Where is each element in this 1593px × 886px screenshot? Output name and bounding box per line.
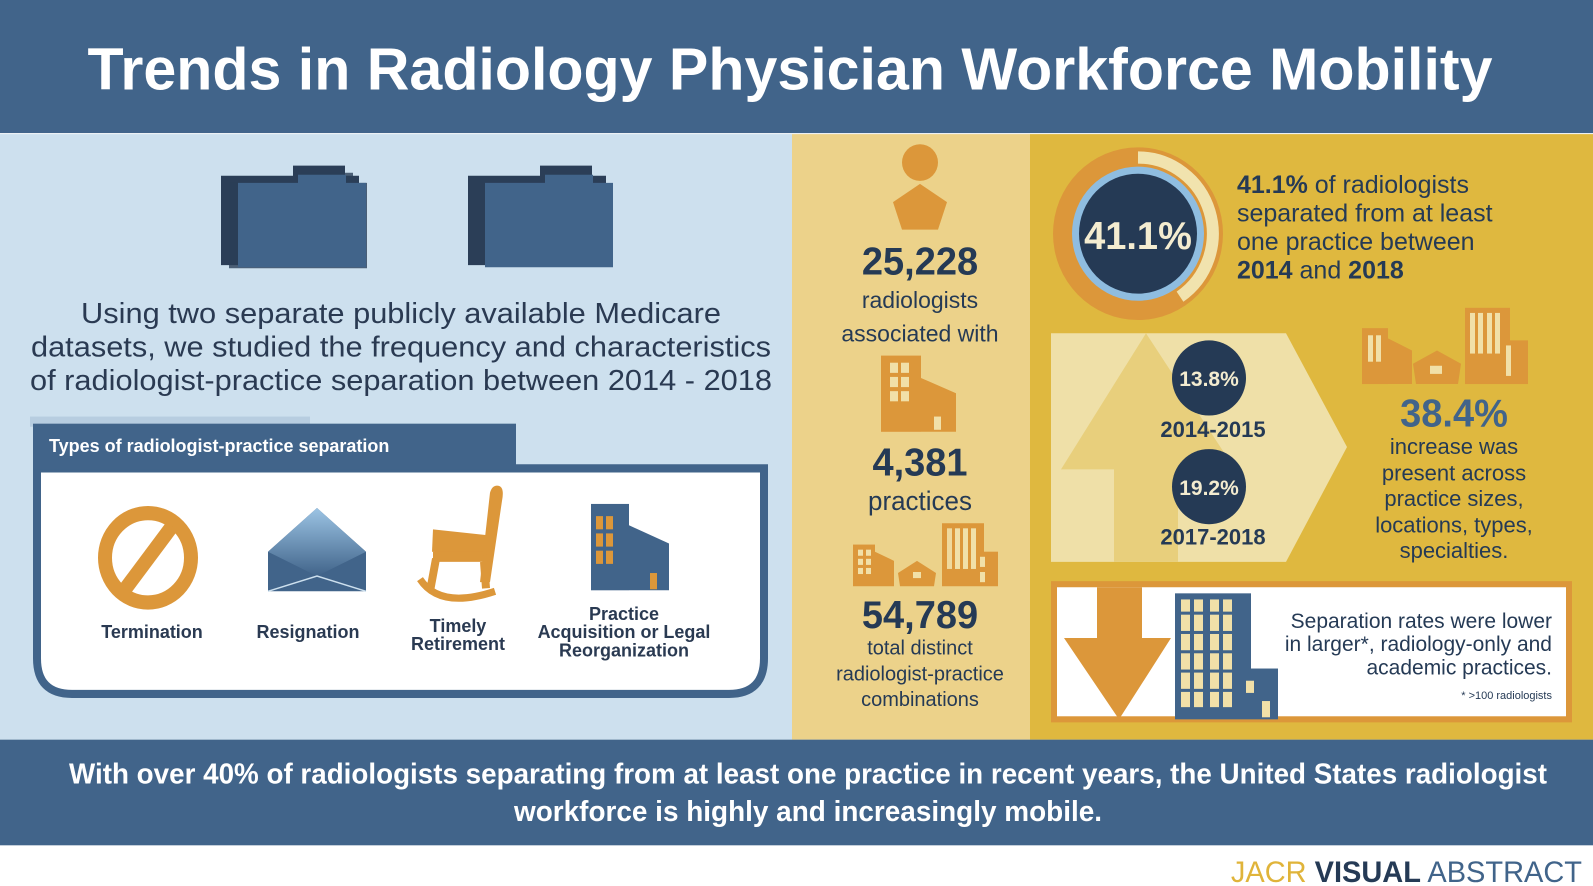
labels: separation types: Retirement <box>411 634 505 654</box>
text: lower separation: Separation rates were lower <box>1291 610 1552 633</box>
chart: donut 41.1% <box>1053 147 1223 320</box>
stat: practices: 4,381 <box>872 441 968 485</box>
stat: 38.4% increase: practice sizes, <box>1384 486 1524 511</box>
stat: combinations: combinations <box>861 689 979 711</box>
stat: radiologists: radiologists <box>862 287 978 313</box>
stat: combinations: radiologist-practice <box>836 664 1004 686</box>
text: 41.1% separated: one practice between <box>1237 228 1475 256</box>
stat: 2014-2015: 13.8% <box>1179 368 1239 391</box>
stat: 2017-2018: 2017-2018 <box>1160 524 1266 550</box>
stat: practices: practices <box>868 486 972 516</box>
text: methods description: of radiologist-practice separation between 2014 - 2018 <box>30 364 772 396</box>
icon: down arrow <box>1064 587 1171 719</box>
labels: separation types: Acquisition or Legal <box>538 622 710 642</box>
panel: types of separation <box>30 417 764 694</box>
stat: 38.4% increase: locations, types, <box>1375 512 1533 537</box>
text: lower separation: academic practices. <box>1367 656 1552 680</box>
icon: folder 2 <box>468 166 613 267</box>
icon: buildings <box>853 523 998 586</box>
labels: separation types: Termination <box>101 622 203 642</box>
text: methods description: Using two separate publicly available Medicare <box>81 297 721 329</box>
stat: 2017-2018: 19.2% <box>1179 477 1239 500</box>
text: lower separation <box>1285 610 1552 702</box>
stat: 38.4% increase: 38.4% <box>1400 392 1508 436</box>
text: lower separation: * >100 radiologists <box>1461 690 1552 702</box>
icon: termination <box>105 513 191 602</box>
chart: increasing arrow <box>1051 333 1347 562</box>
text: 41.1% separated: 2014 and 2018 <box>1237 256 1404 284</box>
stat: combinations: 54,789 <box>862 594 978 637</box>
panel: right results <box>1030 134 1593 740</box>
icon: folder 1 <box>221 166 367 268</box>
icon: practice acquisition building <box>591 504 669 590</box>
icon: buildings row <box>1362 308 1528 384</box>
text: methods description <box>30 297 772 396</box>
stat: 38.4% increase: increase was <box>1390 434 1518 459</box>
stat: 38.4% increase: present across <box>1382 460 1526 486</box>
text: methods description: datasets, we studied the frequency and characteristics <box>31 330 771 363</box>
labels: separation types: Timely <box>430 616 486 636</box>
stat: combinations <box>836 594 1004 711</box>
labels: separation types: Resignation <box>257 622 359 642</box>
icon: resignation envelope <box>268 508 366 591</box>
text: 41.1% separated: separated from at least <box>1237 199 1493 228</box>
stat: 2014-2015: 2014-2015 <box>1160 417 1266 442</box>
stat: 2014-2015 <box>1160 340 1266 442</box>
text: 41.1% separated <box>1237 171 1493 284</box>
header <box>0 0 1593 133</box>
text: 41.1% separated: 41.1% of radiologists <box>1237 171 1469 199</box>
stat: 38.4% increase: specialties. <box>1400 538 1508 563</box>
icon: person <box>893 144 947 230</box>
callout: lower separation <box>1054 584 1569 719</box>
conclusion band: workforce is highly and increasingly mobile. <box>513 795 1102 827</box>
stat: radiologists: 25,228 <box>862 240 978 283</box>
chart: donut 41.1%: 41.1% <box>1084 215 1192 258</box>
text: lower separation: in larger*, radiology-only and <box>1285 633 1552 656</box>
panel: middle counts <box>792 134 1030 740</box>
panel: left methods <box>0 134 792 740</box>
stat: radiologists: associated with <box>841 320 999 346</box>
labels: separation types: Reorganization <box>559 640 689 660</box>
icon: tall building <box>1175 593 1278 719</box>
icon: rocking chair <box>420 486 503 598</box>
conclusion band: With over 40% of radiologists separating from at least one practice in recent years, the United States radiologist <box>69 757 1548 789</box>
stat: radiologists <box>841 240 999 346</box>
conclusion band <box>0 740 1593 845</box>
labels: separation types: Practice <box>589 604 659 624</box>
title: Trends in Radiology Physician Workforce Mobility <box>88 37 1493 103</box>
heading: types: Types of radiologist-practice separation <box>49 436 389 456</box>
stat: 2017-2018 <box>1160 449 1266 550</box>
icon: practice building <box>881 356 956 432</box>
stat: 38.4% increase <box>1375 392 1533 563</box>
stat: practices <box>868 441 972 516</box>
stat: combinations: total distinct <box>867 637 973 659</box>
labels: separation types <box>101 604 710 660</box>
